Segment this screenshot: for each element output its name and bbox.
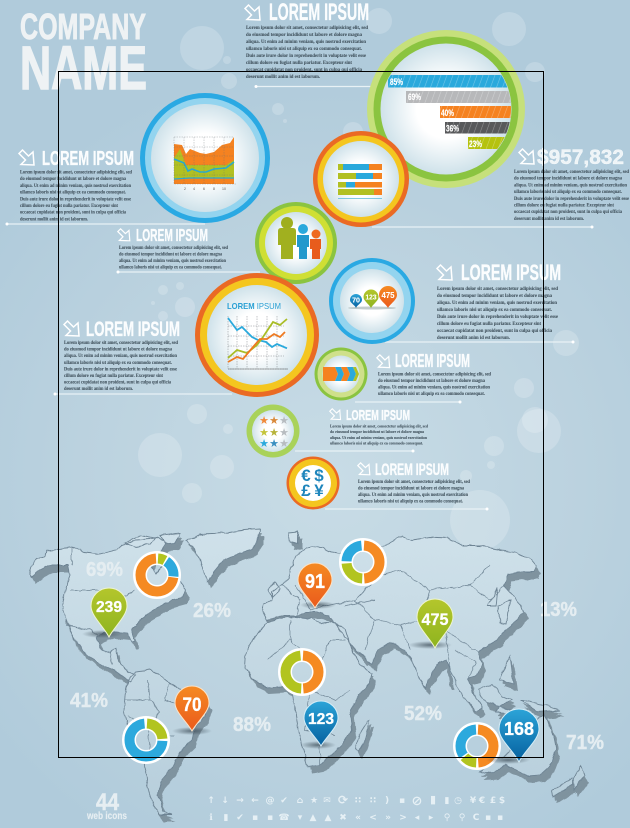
text block: top: [245, 0, 372, 88]
donut: north america: [140, 558, 174, 592]
icon row 2: ℹ: [209, 813, 213, 823]
text block: lower left: ullamco laboris nisi ut aliquip ex ea commodo consequat.: [64, 361, 173, 366]
circle: currency symbols: €: [301, 466, 311, 485]
text block: left: cillum dolore eu fugiat nulla pariatur. Excepteur sint: [20, 204, 118, 209]
icon row 2: [209, 813, 503, 823]
icon row 2: ✔: [236, 813, 244, 823]
percentage labels: 13%: [540, 599, 577, 621]
text block: lower left: do eiusmod tempor incididunt ut labore et dolore magna: [64, 348, 172, 353]
pin: 168: [486, 709, 539, 764]
text block: currency note: ullamco laboris nisi ut aliquip ex ea commodo consequat.: [358, 500, 464, 504]
icon row 2: ▪: [485, 813, 491, 823]
text block: left: aliqua. Ut enim ad minim veniam, quis nostrud exercitation: [20, 184, 131, 189]
circle: horizontal bars: 69%: [408, 92, 421, 102]
text block: stars note: LOREM IPSUM: [346, 407, 410, 424]
icon row 1: ↓: [221, 796, 229, 806]
text block: lower left: cillum dolore eu fugiat nulla pariatur. Excepteur sint: [64, 374, 163, 379]
icon row 1: £: [490, 796, 496, 806]
pin: 91: 91: [305, 571, 325, 593]
icon row 1: ⌂: [297, 796, 304, 806]
percentage labels: 52%: [404, 703, 442, 725]
circle: rating stars: ★: [259, 426, 269, 439]
icon row 2: >: [399, 813, 407, 823]
text block: middle right: ullamco laboris nisi ut aliquip ex ea commodo consequat.: [437, 308, 553, 313]
icon row 1: ∷: [370, 796, 376, 806]
text block: top: ullamco laboris nisi ut aliquip ex ea commodo consequat.: [246, 47, 363, 52]
percentage labels: 41%: [70, 690, 108, 712]
company name title: NAME: [20, 34, 147, 102]
text block: left: Lorem ipsum dolor sit amet, consectetur adipisicing elit, sed: [20, 170, 132, 176]
circle: horizontal bars: [367, 30, 525, 188]
icon row 1: ↑: [207, 796, 215, 806]
text block: left: LOREM IPSUM: [42, 147, 134, 170]
circle: rating stars: ★: [279, 414, 289, 427]
circle: rating stars: ★: [259, 437, 269, 450]
icon row 1: €: [478, 796, 485, 806]
text block: chevron note: LOREM IPSUM: [395, 351, 470, 371]
icon row 2: ⚲: [444, 813, 451, 823]
world map: [30, 529, 589, 822]
circle: currency symbols: [286, 456, 340, 510]
text block: middle right: Duis aute irure dolor in reprehenderit in voluptate velit esse: [437, 315, 559, 320]
text block: middle left: LOREM IPSUM: [136, 225, 208, 245]
icon row 1: ▮: [430, 793, 436, 806]
text block: top: aliqua. Ut enim ad minim veniam, quis nostrud exercitation: [246, 40, 366, 45]
icon row 2: C: [473, 813, 480, 823]
text block: top: Duis aute irure dolor in reprehenderit in voluptate velit esse: [246, 54, 367, 59]
pin: 70: 70: [182, 695, 202, 716]
circle: area chart: 10: [222, 187, 226, 191]
text block: currency note: LOREM IPSUM: [375, 460, 449, 479]
icon row 2: ▸: [429, 813, 434, 823]
text block: currency note: Lorem ipsum dolor sit amet, consectetur adipisicing elit, sed: [358, 480, 470, 485]
circle: location pins: [329, 258, 415, 344]
circle: people: [255, 202, 337, 284]
text block: left: deserunt mollit anim id est laborum.: [20, 217, 89, 222]
icon row 2: «: [355, 813, 361, 823]
text block: middle right: cillum dolore eu fugiat nulla pariatur. Excepteur sint: [437, 322, 541, 327]
text block: middle right: aliqua. Ut enim ad minim veniam, quis nostrud exercitation: [437, 301, 557, 306]
icon row 1: ✉: [323, 796, 331, 806]
icon row 1: @: [266, 796, 274, 806]
circle: area chart: 6: [203, 187, 205, 191]
text block: stars note: ullamco laboris nisi ut aliquip ex ea commodo consequat.: [330, 441, 423, 446]
text block: middle left: Lorem ipsum dolor sit amet, consectetur adipisicing elit, sed: [119, 246, 228, 251]
circle: chevrons: [314, 348, 368, 400]
donut: south america: [129, 723, 163, 757]
company name title: [20, 6, 147, 102]
black frame: [58, 72, 544, 758]
text block: chevron note: do eiusmod tempor incididunt ut labore et dolore magna: [378, 379, 485, 384]
text block: middle right: occaecat cupidatat non proident, sunt in culpa qui officia: [437, 329, 552, 334]
web icons count: 44: [96, 789, 120, 816]
text block: lower left: Duis aute irure dolor in reprehenderit in voluptate velit esse: [64, 367, 178, 372]
icon row 1: ▮: [445, 796, 450, 806]
pin: 475: 475: [422, 610, 448, 629]
icon row 1: ←: [251, 796, 259, 806]
circle: line chart: [195, 273, 319, 397]
text block: middle left: [116, 225, 260, 274]
icon row 2: ◂: [415, 813, 420, 823]
text block: middle right: Lorem ipsum dolor sit amet, consectetur adipisicing elit, sed: [437, 287, 558, 292]
circle: horizontal bars: 36%: [446, 124, 459, 134]
text block: left: [6, 147, 205, 226]
text block: revenue figure: [372, 146, 630, 228]
circle: rating stars: [246, 404, 300, 458]
text block: currency note: [325, 460, 488, 510]
circle: horizontal bars: 40%: [441, 108, 454, 118]
circle: stacked bars: [313, 131, 409, 227]
icon row 2: ☎: [278, 813, 290, 823]
icon row 1: ◷: [454, 796, 462, 806]
pin: 239: 239: [96, 599, 122, 616]
percentage labels: 26%: [193, 600, 231, 622]
donut: russia: [346, 545, 380, 579]
percentage labels: [70, 559, 604, 754]
icon row 2: ▪: [252, 813, 258, 823]
bokeh bubbles: [138, 8, 579, 550]
circle: location pins: 123: [366, 294, 377, 302]
circle: currency symbols: £: [301, 481, 311, 500]
text block: left: ullamco laboris nisi ut aliquip ex ea commodo consequat.: [20, 191, 127, 196]
text block: stars note: [295, 407, 428, 452]
icon row 2: ⚲: [459, 813, 466, 823]
circle: rating stars: ★: [269, 426, 279, 439]
circle: area chart: 4: [193, 187, 195, 191]
text block: chevron note: [355, 351, 491, 404]
text block: left: do eiusmod tempor incididunt ut labore et dolore magna: [20, 177, 126, 182]
circle: currency symbols: ¥: [314, 481, 324, 500]
icon row 1: ): [385, 796, 389, 806]
pin: 168: 168: [504, 719, 534, 739]
pin: 91: [298, 563, 336, 609]
circle: location pins: 475: [382, 291, 395, 300]
percentage labels: 71%: [566, 732, 604, 754]
text block: chevron note: ullamco laboris nisi ut aliquip ex ea commodo consequat.: [378, 392, 486, 397]
text block: lower left: aliqua. Ut enim ad minim veniam, quis nostrud exercitation: [64, 354, 177, 359]
web icons count: [86, 789, 127, 822]
text block: chevron note: aliqua. Ut enim ad minim veniam, quis nostrud exercitation: [378, 386, 490, 390]
icon row 2: ▲: [325, 813, 332, 823]
text block: currency note: aliqua. Ut enim ad minim veniam, quis nostrud exercitation: [358, 493, 468, 498]
icon row 2: ▲: [310, 813, 317, 823]
text block: middle left: ullamco laboris nisi ut aliquip ex ea commodo consequat.: [119, 266, 223, 270]
text block: stars note: aliqua. Ut enim ad minim veniam, quis nostrud exercitation: [330, 435, 427, 440]
text block: top: Lorem ipsum dolor sit amet, consectetur adipisicing elit, sed: [246, 26, 368, 31]
company name title: COMPANY: [20, 6, 146, 47]
circle: currency symbols: $: [314, 466, 324, 485]
circle: rating stars: ★: [269, 414, 279, 427]
icon row 1: ✔: [280, 796, 288, 806]
text block: middle right: deserunt mollit anim id est laborum.: [437, 336, 511, 341]
icon row 2: <: [369, 813, 377, 823]
text block: lower left: LOREM IPSUM: [86, 318, 180, 341]
icon row 2: ✖: [339, 813, 347, 823]
circle: location pins: 70: [352, 298, 360, 304]
text block: middle right: do eiusmod tempor incididunt ut labore et dolore magna: [437, 294, 552, 299]
icon row 2: »: [385, 813, 391, 823]
percentage labels: 69%: [86, 559, 123, 581]
text block: stars note: do eiusmod tempor incididunt ut labore et dolore magna: [330, 429, 425, 434]
text block: lower left: deserunt mollit anim id est laborum.: [64, 387, 134, 392]
text block: stars note: Lorem ipsum dolor sit amet, consectetur adipisicing elit, sed: [330, 424, 428, 428]
text block: top: occaecat cupidatat non proident, sunt in culpa qui officia: [246, 68, 362, 73]
pin: 239: [82, 588, 127, 638]
circle: area chart: [140, 93, 270, 223]
text block: left: occaecat cupidatat non proident, sunt in culpa qui officia: [20, 211, 126, 216]
circle: rating stars: ★: [279, 426, 289, 439]
pin: 123: 123: [308, 711, 334, 728]
icon row 1: ⟳: [338, 793, 348, 807]
text block: currency note: do eiusmod tempor incididunt ut labore et dolore magna: [358, 486, 464, 492]
icon row 1: ¥: [470, 796, 477, 806]
circle: rating stars: ★: [259, 414, 269, 427]
icon row 1: ⊘: [412, 794, 422, 809]
text block: lower left: occaecat cupidatat non proident, sunt in culpa qui officia: [64, 381, 171, 386]
circle: horizontal bars: 85%: [390, 77, 403, 87]
pin: 475: [408, 599, 453, 649]
icon row 2: ▪: [267, 813, 273, 823]
text block: left: Duis aute irure dolor in reprehenderit in voluptate velit esse: [20, 197, 132, 202]
text block: top: do eiusmod tempor incididunt ut labore et dolore magna: [246, 33, 362, 38]
text block: top: deserunt mollit anim id est laborum.: [246, 75, 321, 80]
circle: rating stars: ★: [279, 437, 289, 450]
icon row 1: [207, 793, 505, 809]
text block: top: cillum dolore eu fugiat nulla pariatur. Excepteur sint: [246, 61, 352, 66]
web icons count: web icons: [86, 811, 127, 822]
icon row 1: ★: [310, 796, 318, 806]
text block: middle right: [385, 260, 574, 344]
text block: revenue figure: deserunt mollit anim id est laborum.: [514, 217, 585, 222]
icon row 1: →: [236, 796, 244, 806]
text block: lower left: Lorem ipsum dolor sit amet, consectetur adipisicing elit, sed: [64, 341, 178, 346]
icon row 1: ▪: [399, 796, 405, 806]
circle: area chart: 2: [184, 187, 186, 191]
percentage labels: 88%: [233, 714, 271, 736]
text block: chevron note: Lorem ipsum dolor sit amet, consectetur adipisicing elit, sed: [378, 372, 491, 378]
pin: 123: [300, 701, 338, 749]
icon row 2: ▾: [298, 813, 303, 823]
circle: area chart: 8: [213, 187, 215, 191]
icon row 2: ▪: [497, 813, 503, 823]
icon row 1: ∷: [355, 796, 361, 806]
text block: middle left: do eiusmod tempor incididunt ut labore et dolore magna: [119, 252, 222, 258]
circle: line chart: LOREM IPSUM: [227, 301, 281, 311]
text block: middle left: aliqua. Ut enim ad minim veniam, quis nostrud exercitation: [119, 259, 226, 264]
text block: revenue figure: cillum dolore eu fugiat nulla pariatur. Excepteur sint: [514, 204, 614, 208]
circle: rating stars: ★: [269, 437, 279, 450]
text block: lower left: [54, 318, 232, 396]
text block: revenue figure: $957,832: [537, 146, 624, 169]
pin: 70: [172, 686, 212, 735]
circle: horizontal bars: 23%: [469, 139, 482, 149]
donut: australia: [460, 729, 494, 763]
donut: africa: [285, 655, 319, 689]
text block: middle right: LOREM IPSUM: [461, 260, 561, 285]
icon row 2: ▮: [224, 813, 229, 823]
icon row 1: $: [499, 796, 505, 806]
